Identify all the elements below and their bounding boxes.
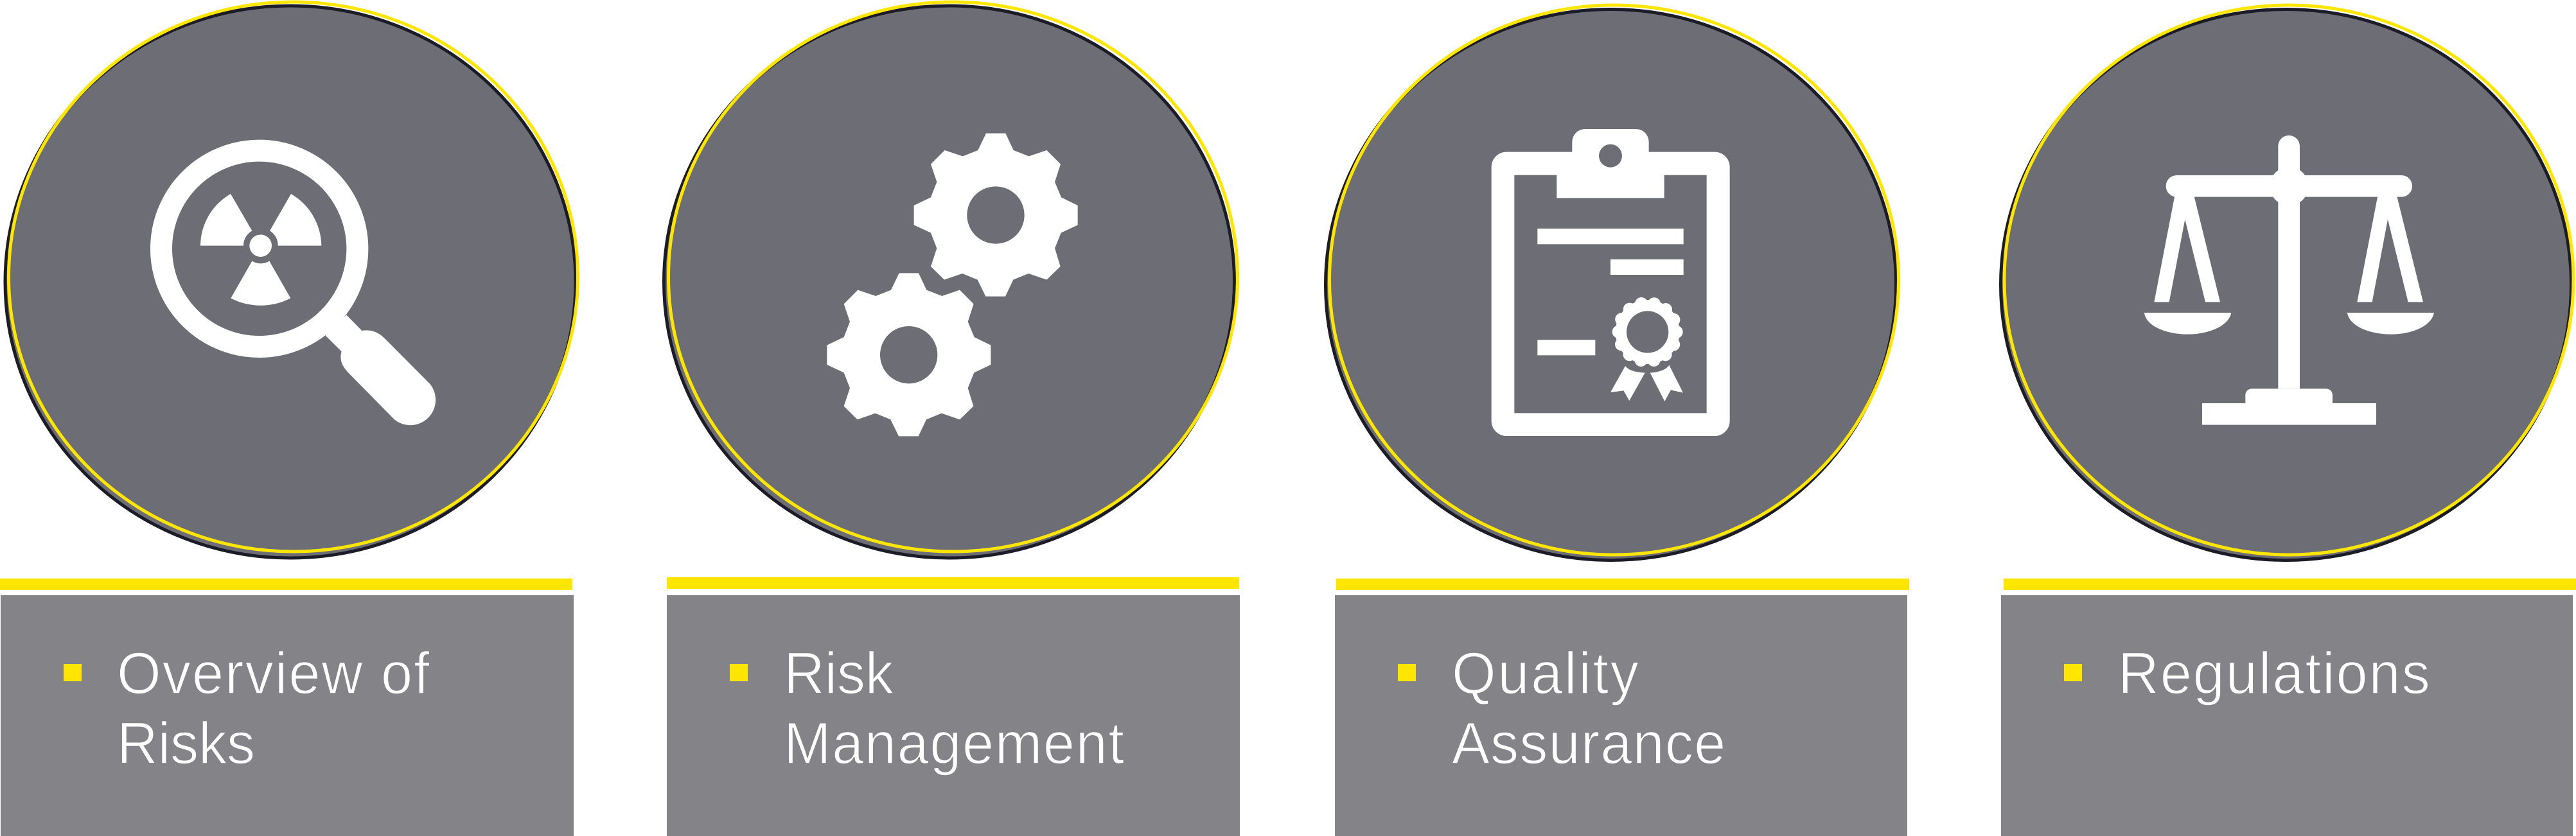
- label text: Risk: [784, 640, 894, 706]
- yellow bar: [1336, 579, 1909, 590]
- label text: Assurance: [1452, 710, 1725, 776]
- yellow bar: [667, 577, 1239, 589]
- label text: Overview of: [117, 640, 430, 706]
- label text: [117, 640, 430, 776]
- label text: [784, 640, 1124, 776]
- bullet: [730, 664, 748, 681]
- bullet: [1398, 664, 1416, 681]
- yellow bar: [2004, 579, 2576, 590]
- column: Regulations: [2000, 5, 2576, 836]
- circle badge: [1326, 5, 1899, 560]
- label panel: [667, 595, 1240, 836]
- icon: balance scales: [2144, 135, 2434, 425]
- label text: [1452, 640, 1725, 776]
- circle badge: [664, 2, 1237, 558]
- icon: magnifier with radiation symbol: [161, 151, 436, 425]
- circle badge: [5, 2, 578, 558]
- label text: Quality: [1452, 640, 1639, 706]
- column: Risk Management: [664, 2, 1240, 836]
- yellow bar: [0, 579, 572, 590]
- bullet: [2064, 664, 2082, 681]
- icon: gears: [827, 134, 1078, 436]
- column: Quality Assurance: [1326, 5, 1909, 836]
- circle badge: [2000, 5, 2573, 560]
- label panel: [2001, 595, 2573, 836]
- bullet: [64, 664, 82, 681]
- label text: Risks: [117, 710, 255, 776]
- label panel: [1, 595, 574, 836]
- column: Overview of Risks: [0, 2, 578, 836]
- label panel: [1335, 595, 1907, 836]
- label text: Regulations: [2118, 640, 2430, 706]
- icon: clipboard with certificate rosette: [1492, 129, 1730, 436]
- label text: Management: [784, 710, 1124, 776]
